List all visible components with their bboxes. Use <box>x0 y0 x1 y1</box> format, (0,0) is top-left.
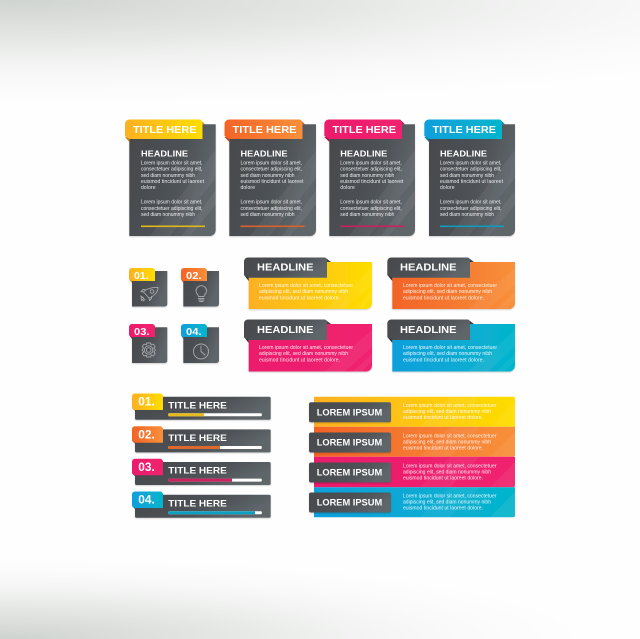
headline and text: euismod tincidunt ut laoreet <box>440 179 504 185</box>
headline tab: HEADLINE <box>400 325 457 336</box>
progress bar <box>168 511 262 514</box>
panel: title card orange <box>224 120 316 236</box>
panel: headline card orange <box>387 258 515 309</box>
panel: title card pink <box>324 120 415 236</box>
panel: title card yellow <box>125 120 216 236</box>
number tab: 03. <box>138 462 155 474</box>
headline and text: sed diam nonummy nibh <box>141 212 195 218</box>
body text: euismod tincidunt ut laoreet dolore. <box>259 295 340 301</box>
headline and text: euismod tincidunt ut laoreet <box>340 179 404 185</box>
label plate <box>309 432 391 452</box>
panel: stacked strip yellow <box>309 397 515 427</box>
headline and text: Lorem ipsum dolor sit amet, <box>240 160 302 166</box>
panel: stacked strip pink <box>309 457 515 487</box>
body text: Lorem ipsum dolor sit amet, consectetuer <box>403 283 497 289</box>
panel: progress row 02 <box>132 426 271 452</box>
headline and text: HEADLINE <box>340 149 388 159</box>
body text: euismod tincidunt ut laoreet dolore. <box>403 445 483 451</box>
body text: Lorem ipsum dolor sit amet, consectetuer <box>403 463 497 469</box>
card body <box>229 124 316 236</box>
body text <box>403 283 497 301</box>
label plate: LOREM IPSUM <box>317 498 382 508</box>
label plate: LOREM IPSUM <box>317 438 382 448</box>
icon: clock <box>194 344 208 359</box>
progress bar <box>168 446 262 449</box>
body text: euismod tincidunt ut laoreet dolore. <box>259 357 340 363</box>
panel: progress row 01 <box>132 394 271 420</box>
icon: gear <box>142 343 156 357</box>
panel: stacked strip orange <box>309 427 515 457</box>
headline and text: consectetuer adipiscing elit, <box>340 167 402 173</box>
headline and text: HEADLINE <box>440 149 487 159</box>
body text <box>403 463 497 481</box>
body text: adipiscing elit, sed diam nonummy nibh <box>403 289 492 295</box>
body text: adipiscing elit, sed diam nonummy nibh <box>403 351 492 357</box>
headline and text: consectetuer adipiscing elit, <box>440 167 502 173</box>
headline and text: Lorem ipsum dolor sit amet, <box>340 160 402 166</box>
headline and text <box>240 149 304 218</box>
accent line <box>340 226 404 227</box>
body text: adipiscing elit, sed diam nonummy nibh <box>259 289 348 295</box>
panel: headline card yellow <box>244 258 372 309</box>
headline tab: HEADLINE <box>257 325 314 336</box>
headline and text: euismod tincidunt ut laoreet <box>240 179 304 185</box>
headline and text: consectetuer adipiscing elit, <box>340 206 402 212</box>
label plate <box>309 462 391 482</box>
panel: icon tile 02 bulb <box>181 268 219 306</box>
card body <box>129 124 216 236</box>
panel: title card blue <box>424 120 515 236</box>
body text: euismod tincidunt ut laoreet dolore. <box>403 475 483 481</box>
headline and text: dolore <box>440 185 455 191</box>
body text: Lorem ipsum dolor sit amet, consectetuer <box>403 403 497 409</box>
row title: TITLE HERE <box>168 400 227 411</box>
panel: stacked strip blue <box>309 487 515 517</box>
number tab: 02. <box>186 271 202 282</box>
panel: headline card pink <box>244 320 372 372</box>
headline and text <box>440 149 504 218</box>
headline and text: Lorem ipsum dolor sit amet, <box>141 200 202 206</box>
headline and text: consectetuer adipiscing elit, <box>440 206 502 212</box>
headline and text: sed diam nonummy nibh <box>240 212 295 218</box>
label plate <box>309 492 391 512</box>
accent line <box>440 226 504 227</box>
body text <box>259 283 353 301</box>
headline and text: consectetuer adipiscing elit, <box>141 167 202 173</box>
headline and text: sed diam nonummy nibh <box>340 173 395 179</box>
headline and text: Lorem ipsum dolor sit amet, <box>141 160 202 166</box>
body text: Lorem ipsum dolor sit amet, consectetuer <box>403 345 497 351</box>
body text: adipiscing elit, sed diam nonummy nibh <box>403 409 491 415</box>
headline and text: Lorem ipsum dolor sit amet, <box>340 200 402 206</box>
headline and text <box>141 149 205 218</box>
title tab: TITLE HERE <box>133 124 196 136</box>
headline and text: consectetuer adipiscing elit, <box>240 206 302 212</box>
number tab: 03. <box>134 327 150 338</box>
headline and text: consectetuer adipiscing elit, <box>240 167 302 173</box>
headline and text: Lorem ipsum dolor sit amet, <box>440 200 502 206</box>
body text <box>403 493 497 511</box>
headline and text: sed diam nonummy nibh <box>240 173 295 179</box>
body text: Lorem ipsum dolor sit amet, consectetuer <box>403 493 497 499</box>
icon: rocket <box>141 287 158 301</box>
headline and text: dolore <box>141 185 156 191</box>
number tab: 04. <box>138 495 155 507</box>
body text: euismod tincidunt ut laoreet dolore. <box>403 295 484 301</box>
headline and text <box>340 149 404 218</box>
body text: Lorem ipsum dolor sit amet, consectetuer <box>403 433 497 439</box>
headline and text: euismod tincidunt ut laoreet <box>141 179 205 185</box>
label plate: LOREM IPSUM <box>317 407 382 417</box>
body text: adipiscing elit, sed diam nonummy nibh <box>403 469 491 475</box>
progress bar <box>168 413 262 416</box>
card body <box>429 124 515 236</box>
headline and text: sed diam nonummy nibh <box>440 212 494 218</box>
title tab: TITLE HERE <box>332 124 396 136</box>
headline and text: dolore <box>340 185 355 191</box>
progress bar <box>168 479 262 482</box>
row title: TITLE HERE <box>168 466 227 477</box>
body text <box>259 345 353 363</box>
row title: TITLE HERE <box>168 433 227 444</box>
headline and text: sed diam nonummy nibh <box>440 173 494 179</box>
body text: Lorem ipsum dolor sit amet, consectetuer <box>259 345 353 351</box>
body text: euismod tincidunt ut laoreet dolore. <box>403 357 484 363</box>
row title: TITLE HERE <box>168 498 227 509</box>
headline and text: dolore <box>240 185 255 191</box>
panel: icon tile 04 clock <box>181 324 219 363</box>
body text: Lorem ipsum dolor sit amet, consectetuer <box>259 283 353 289</box>
number tab: 04. <box>186 327 202 338</box>
headline and text: sed diam nonummy nibh <box>340 212 395 218</box>
headline tab: HEADLINE <box>257 263 314 274</box>
headline tab: HEADLINE <box>400 263 457 274</box>
headline and text: Lorem ipsum dolor sit amet, <box>240 200 302 206</box>
number tab: 01. <box>138 397 155 409</box>
number tab: 02. <box>138 429 155 441</box>
body text: euismod tincidunt ut laoreet dolore. <box>403 505 483 511</box>
headline and text: sed diam nonummy nibh <box>141 173 195 179</box>
title tab: TITLE HERE <box>232 124 296 136</box>
number tab: 01. <box>134 271 149 282</box>
card body <box>329 124 415 236</box>
body text: adipiscing elit, sed diam nonummy nibh <box>403 499 491 505</box>
body text: euismod tincidunt ut laoreet dolore. <box>403 415 483 421</box>
headline and text: HEADLINE <box>141 149 188 159</box>
headline and text: Lorem ipsum dolor sit amet, <box>440 160 502 166</box>
body text: adipiscing elit, sed diam nonummy nibh <box>403 439 491 445</box>
panel: icon tile 03 gear <box>129 324 167 363</box>
accent line <box>240 226 304 227</box>
accent line <box>141 226 205 227</box>
panel: icon tile 01 rocket <box>129 268 167 306</box>
headline and text: HEADLINE <box>240 149 288 159</box>
icon: light bulb <box>196 286 207 302</box>
body text <box>403 345 497 363</box>
body text <box>403 433 497 451</box>
body text: adipiscing elit, sed diam nonummy nibh <box>259 351 348 357</box>
panel: progress row 04 <box>132 492 271 518</box>
title tab: TITLE HERE <box>432 124 496 136</box>
headline and text: consectetuer adipiscing elit, <box>141 206 202 212</box>
panel: headline card blue <box>387 320 515 372</box>
panel: progress row 03 <box>132 459 271 485</box>
label plate <box>309 402 391 422</box>
body text <box>403 403 497 421</box>
label plate: LOREM IPSUM <box>317 468 382 478</box>
